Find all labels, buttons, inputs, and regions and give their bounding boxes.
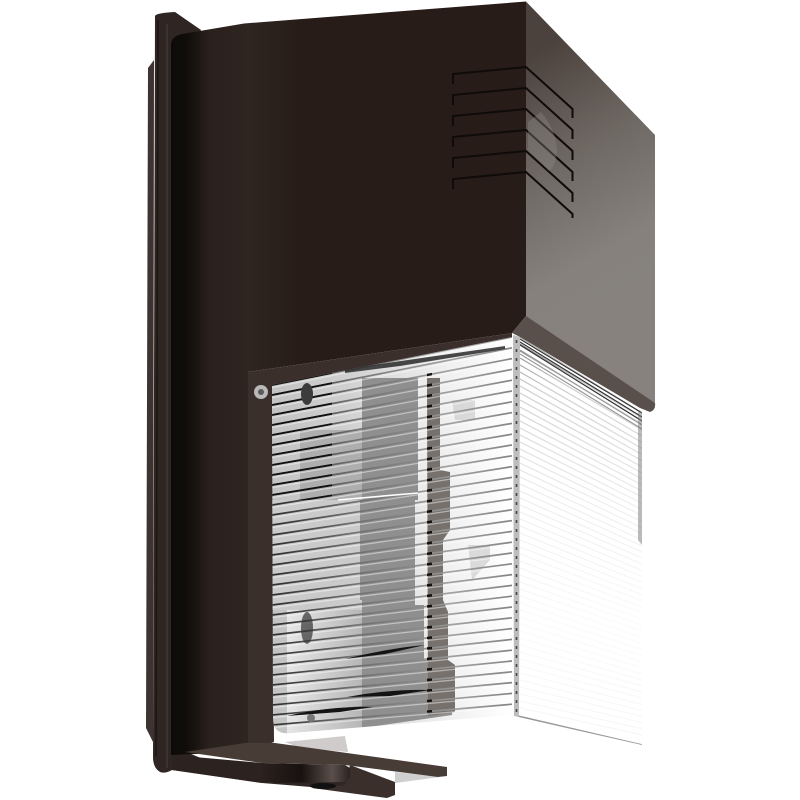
bracket top plate	[185, 743, 447, 777]
housing front face	[171, 2, 526, 755]
reflected bracket shade	[285, 736, 348, 752]
bottom mounting bracket	[172, 743, 447, 798]
bracket front underside	[172, 755, 262, 783]
lens frame	[248, 333, 512, 752]
internal dark strip	[427, 378, 455, 716]
bracket hub	[262, 763, 350, 783]
side face lower trim	[512, 316, 655, 412]
lens base	[270, 330, 515, 740]
top dark glare streaks	[345, 346, 505, 373]
mounting flange	[153, 12, 348, 790]
grey ribs below trim	[520, 350, 642, 429]
upper lamp dark ellipse	[301, 383, 313, 405]
side lens ribs	[520, 337, 642, 735]
lens ribs	[272, 337, 512, 725]
black rib fragments in strip	[427, 372, 432, 713]
bracket leg reflection	[395, 772, 440, 783]
illustration: bronze wall pack light fixture	[146, 2, 656, 798]
lens corner seam	[513, 335, 520, 717]
vent slots	[453, 67, 572, 218]
side lens	[515, 335, 645, 747]
seam noise	[516, 340, 518, 716]
housing side face	[526, 2, 655, 403]
central grey column	[360, 378, 452, 728]
upper left dark ribs	[272, 373, 332, 500]
vent reflection patch	[528, 112, 557, 171]
left soft reflection	[287, 610, 363, 735]
upper soft reflection	[300, 430, 362, 502]
glare line	[338, 493, 418, 500]
right edge rib shade	[638, 412, 642, 545]
bright strip beside column	[418, 378, 427, 500]
mid soft reflection	[272, 500, 362, 610]
side lens base	[520, 337, 529, 342]
dark ribs below trim	[520, 339, 642, 421]
black clip	[310, 783, 336, 789]
bottom edge serration	[518, 716, 642, 745]
screw	[254, 385, 268, 399]
dark strip right glare	[452, 400, 490, 580]
small lamp mark	[307, 714, 315, 722]
lower lamp dark ellipse	[301, 612, 313, 644]
back plate edge	[146, 60, 154, 742]
lamp reflection streaks	[287, 645, 430, 716]
rib highlights	[272, 355, 490, 728]
front lens	[270, 330, 515, 740]
bracket leg	[312, 765, 395, 798]
